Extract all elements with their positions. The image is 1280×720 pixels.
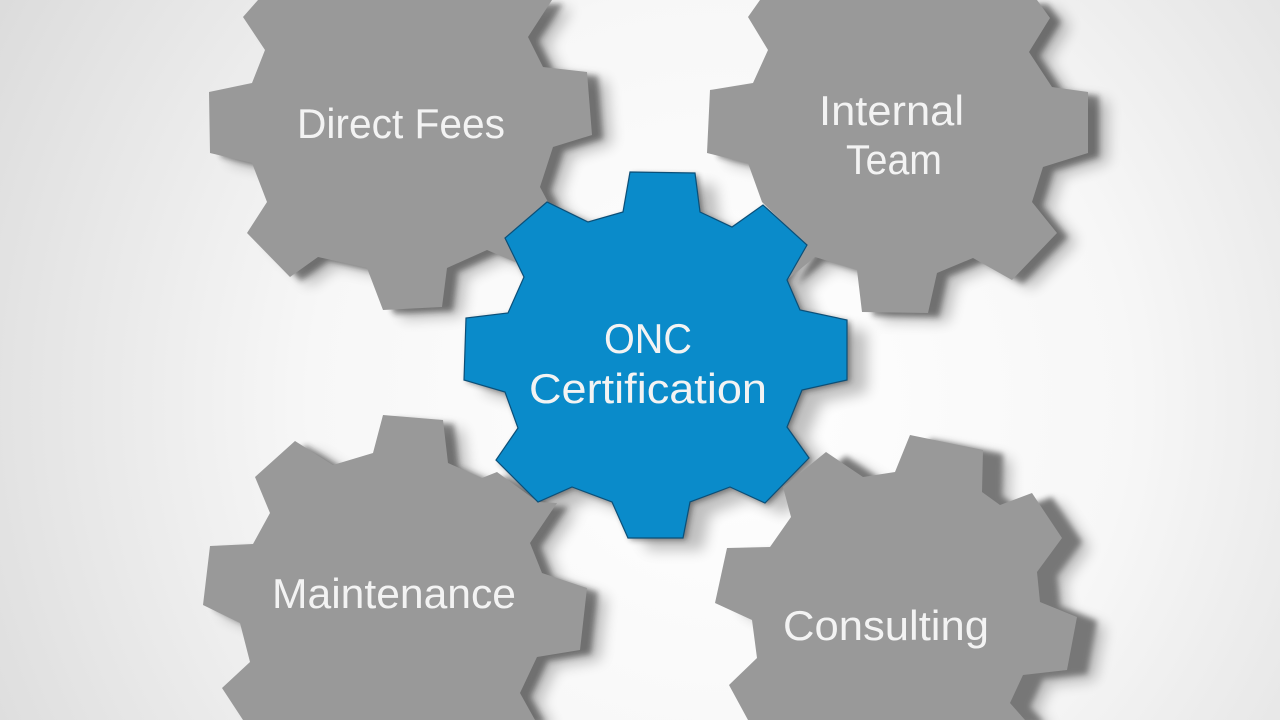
label: Maintenance: Maintenance: [272, 570, 516, 617]
label: Direct Fees: Direct Fees: [297, 100, 505, 147]
label: Consulting: Consulting: [783, 602, 989, 649]
label: ONC Certification: [529, 315, 767, 412]
label: Internal Team: Internal: [819, 87, 964, 134]
label: ONC Certification: Certification: [529, 365, 767, 412]
label: ONC Certification: ONC: [604, 315, 692, 362]
gear: Maintenance: [203, 415, 587, 720]
gear: Direct Fees: [209, 0, 592, 310]
gear drop shadows: [214, 4, 1108, 720]
label: Internal Team: [819, 87, 964, 183]
gear: Consulting: [715, 435, 1077, 720]
gear: Internal Team: [707, 0, 1088, 313]
label: Internal Team: Team: [846, 136, 942, 183]
central gear: ONC Certification: [464, 172, 847, 538]
